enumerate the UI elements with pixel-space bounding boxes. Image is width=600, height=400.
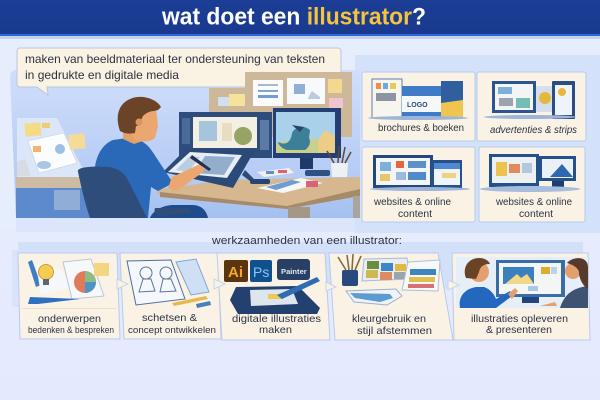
step 3: digitale illustraties maken bbox=[217, 253, 330, 340]
icon: Ai: Ai bbox=[228, 264, 243, 281]
monitor bbox=[496, 260, 565, 303]
icon: Painter: Painter bbox=[281, 267, 307, 276]
section heading: werkzaamheden van een illustrator: bbox=[211, 235, 402, 247]
icon: brush cup bbox=[338, 254, 361, 286]
title: wat doet een illustrator? bbox=[161, 4, 426, 30]
woman bbox=[540, 258, 588, 308]
step caption: schetsen & bbox=[142, 312, 197, 324]
step 2: schetsen en concept ontwikkelen bbox=[120, 253, 221, 339]
panel: websites en online content 2 bbox=[479, 147, 585, 222]
forearm bbox=[168, 164, 206, 191]
step caption: illustraties opleveren bbox=[471, 313, 568, 325]
arrow: step 4 to 5 bbox=[448, 280, 459, 290]
card caption: content bbox=[519, 209, 553, 220]
monitor: drawing software bbox=[179, 112, 272, 158]
monitor: dragon illustration bbox=[273, 108, 341, 176]
panel: websites en online content bbox=[362, 147, 475, 222]
step caption: & presenteren bbox=[486, 324, 552, 336]
arrow: step 1 to 2 bbox=[117, 279, 128, 289]
left desk bbox=[16, 177, 82, 188]
icon: Ps: Ps bbox=[253, 264, 269, 280]
card caption: brochures & boeken bbox=[378, 123, 464, 134]
bubble text: maken van beeldmateriaal ter ondersteuning van teksten bbox=[25, 52, 325, 66]
step caption: kleurgebruik en bbox=[352, 313, 426, 325]
trousers and armrest bbox=[150, 205, 208, 218]
card caption: websites & online bbox=[373, 197, 451, 208]
cork board bbox=[209, 72, 352, 137]
left wall notes bbox=[17, 118, 87, 177]
step caption: stijl afstemmen bbox=[357, 325, 432, 337]
panel: brochures en boeken: LOGO bbox=[407, 102, 428, 109]
drawing tablet bbox=[163, 148, 257, 188]
card caption: content bbox=[398, 209, 432, 220]
card caption: advertenties & strips bbox=[490, 125, 577, 136]
illustrator figure bbox=[95, 97, 211, 218]
card caption: websites & online bbox=[495, 197, 572, 208]
step 4: kleurgebruik en stijl afstemmen bbox=[329, 253, 453, 340]
step 1: onderwerpen bedenken en bespreken bbox=[18, 253, 120, 339]
pencil cup bbox=[327, 146, 351, 177]
step caption: onderwerpen bbox=[38, 313, 101, 325]
step caption bbox=[232, 313, 321, 336]
desk chair bbox=[78, 167, 190, 218]
panel: illustrator at desk scene bbox=[10, 48, 360, 218]
step caption: bedenken & bespreken bbox=[28, 325, 114, 335]
arrow: step 2 to 3 bbox=[214, 279, 225, 289]
step caption bbox=[352, 313, 432, 337]
step caption: maken bbox=[259, 324, 292, 336]
step caption: concept ontwikkelen bbox=[128, 325, 216, 336]
step caption bbox=[128, 312, 216, 336]
step caption bbox=[471, 313, 568, 336]
panel: advertenties en strips bbox=[477, 72, 586, 141]
step 5: illustraties opleveren en presenteren bbox=[452, 253, 590, 340]
step caption bbox=[28, 313, 114, 335]
colour boards bbox=[346, 258, 440, 305]
man bbox=[460, 258, 518, 308]
speech bubble: in gedrukte en digitale media bbox=[25, 68, 179, 82]
hair bbox=[118, 97, 161, 134]
speech bubble bbox=[17, 48, 341, 95]
panel: brochures en boeken bbox=[362, 72, 475, 141]
right desk bbox=[157, 177, 360, 218]
icon: tablet and stylus bbox=[230, 277, 320, 314]
title banner bbox=[0, 0, 600, 39]
stylus bbox=[190, 155, 211, 171]
papers and swatches on desk bbox=[250, 168, 323, 193]
step caption: digitale illustraties bbox=[232, 313, 321, 325]
torso and sleeve bbox=[95, 138, 173, 218]
neck and head bbox=[123, 126, 143, 144]
arrow: step 3 to 4 bbox=[326, 282, 336, 291]
card caption bbox=[373, 197, 451, 220]
card caption bbox=[495, 197, 572, 220]
